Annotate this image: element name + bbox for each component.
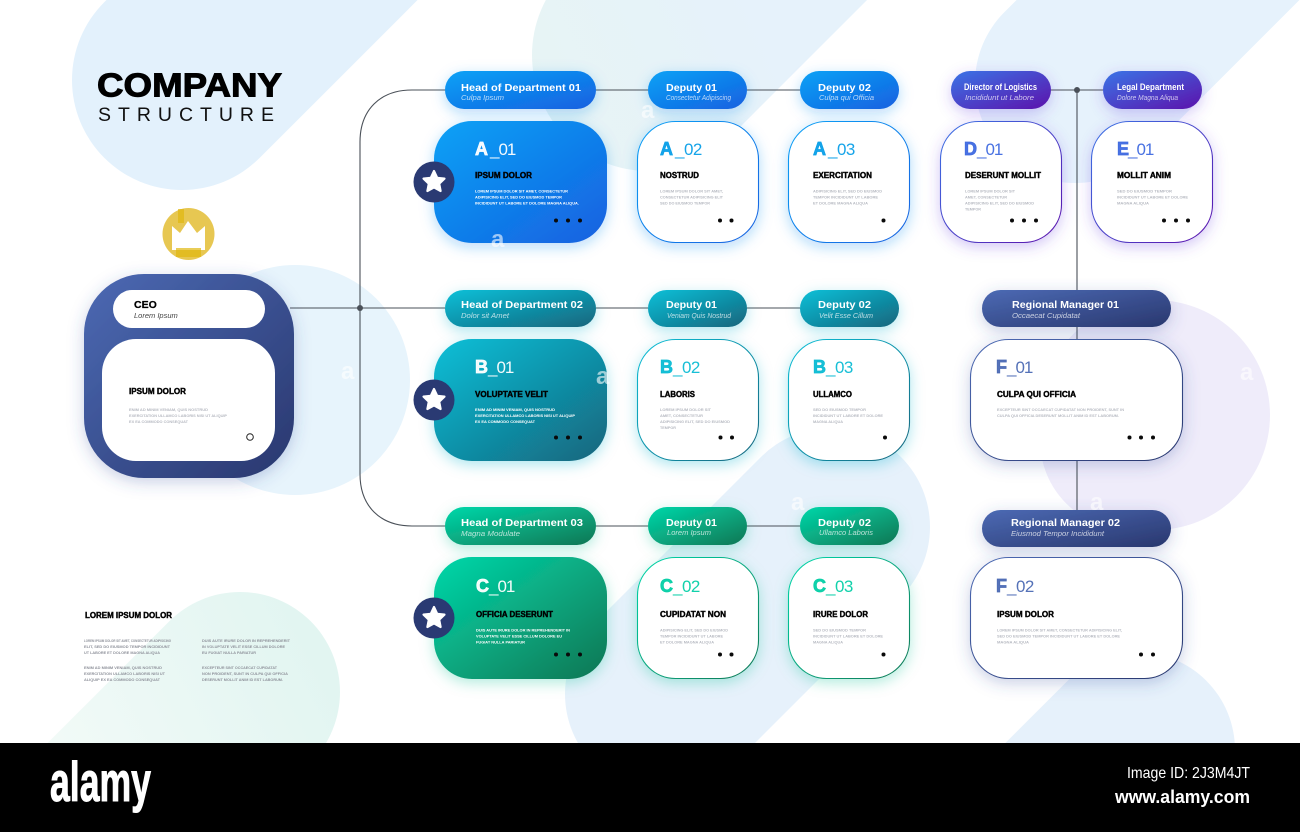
- icon: crown: [162, 208, 214, 260]
- footer bar: [0, 743, 1300, 832]
- card: B_03: [788, 340, 910, 460]
- card: B_01: _01: [487, 358, 514, 377]
- card: D_01: ADIPISICING ELIT, SED DO EIUSMOD: [965, 200, 1034, 206]
- card: B_03: MAGNA ALIQUA: [813, 419, 843, 424]
- pill: Head of Department 01: Head of Department 01: [461, 82, 581, 94]
- card: C_01: OFFICIA DESERUNT: [476, 610, 553, 619]
- CEO description: ENIM AD MINIM VENIAM, QUIS NOSTRUD: [129, 407, 208, 412]
- text block: notes: LOREM IPSUM DOLOR: [85, 611, 172, 620]
- card: F_01: CULPA QUI OFFICIA DESERUNT MOLLIT ANIM ID EST LABORUM.: [997, 413, 1119, 418]
- pill: Deputy 02 row A: [800, 71, 899, 109]
- card: B_02: TEMPOR: [660, 425, 676, 430]
- pill: Deputy 02 row A: Deputy 02: [818, 82, 871, 94]
- card: B_02: _02: [672, 358, 700, 377]
- card: C_03: MAGNA ALIQUA: [813, 640, 843, 644]
- watermark marks: a: [791, 489, 805, 516]
- card: A_02: SED DO EIUSMOD TEMPOR: [660, 200, 710, 206]
- card: F_01: [970, 340, 1182, 460]
- pill: Head of Department 03: Magna Modulate: [461, 529, 520, 538]
- card: C_03: INCIDIDUNT UT LABORE ET DOLORE: [813, 634, 883, 638]
- pill: Head of Department 02: [445, 290, 596, 327]
- card: A_02: _02: [674, 140, 702, 159]
- card: D_01: [940, 122, 1062, 242]
- card: A_03: _03: [827, 140, 855, 159]
- CEO description: EX EA COMMODO CONSEQUAT: [129, 419, 189, 424]
- watermark marks: a: [1240, 359, 1254, 386]
- card: B_03: INCIDIDUNT UT LABORE ET DOLORE: [813, 413, 883, 418]
- text block: notes: DESERUNT MOLLIT ANIM ID EST LABORUM.: [202, 677, 283, 682]
- pill: Head of Department 03: Head of Department 03: [461, 517, 583, 529]
- pill: Deputy 01 row C: Lorem Ipsum: [667, 528, 711, 537]
- text block: notes: DUIS AUTE IRURE DOLOR IN REPREHENDERIT: [202, 638, 291, 643]
- card: A_02: CONSECTETUR ADIPISICING ELIT: [660, 194, 724, 200]
- CEO description: EXERCITATION ULLAMCO LABORIS NISI UT ALIQUIP: [129, 413, 227, 418]
- card: E_01: MAGNA ALIQUA: [1117, 200, 1149, 206]
- card: C_01: _01: [488, 577, 515, 596]
- pill: Deputy 02 row A: Culpa qui Officia: [819, 93, 874, 102]
- card: C_02: _02: [672, 577, 700, 596]
- pill: Director of Logistics: Incididunt ut Labore: [965, 93, 1034, 102]
- CEO name pill: CEO: [134, 299, 157, 311]
- panel: CEO: [84, 274, 294, 478]
- text block: notes: ALIQUIP EX EA COMMODO CONSEQUAT: [84, 677, 161, 682]
- card: D_01: TEMPOR: [965, 206, 981, 212]
- watermark marks: a: [596, 363, 610, 390]
- card: B_01: VOLUPTATE VELIT: [475, 390, 548, 399]
- watermark marks: a: [1090, 489, 1104, 516]
- card: C_03: IRURE DOLOR: [813, 610, 868, 619]
- card: C_02: ADIPISICING ELIT, SED DO EIUSMOD: [660, 628, 728, 632]
- pill: Deputy 01 row C: [648, 507, 747, 545]
- card: B_01: B: [475, 357, 488, 377]
- card: D_01: D: [964, 139, 977, 159]
- footer bar: www.alamy.com: [1114, 787, 1250, 807]
- watermark marks: a: [641, 97, 655, 124]
- card: A_03: ADIPISICING ELIT, SED DO EIUSMOD: [813, 188, 882, 194]
- card: C_02: [638, 558, 758, 678]
- text block: notes: [84, 611, 291, 682]
- pill: Legal Department: Dolore Magna Aliqua: [1117, 93, 1178, 102]
- text block: notes: ELIT, SED DO EIUSMOD TEMPOR INCIDIDUNT: [84, 644, 171, 649]
- card: F_01: CULPA QUI OFFICIA: [997, 390, 1076, 399]
- card: C_01: [434, 557, 607, 679]
- watermark marks: a: [341, 358, 355, 385]
- card: D_01: LOREM IPSUM DOLOR SIT: [965, 188, 1016, 194]
- card: E_01: E: [1117, 139, 1129, 159]
- icon: star A: [414, 162, 454, 202]
- pill: Deputy 01 row B: [648, 290, 747, 327]
- card: B_01: EX EA COMMODO CONSEQUAT: [475, 419, 536, 424]
- card: E_01: INCIDIDUNT UT LABORE ET DOLORE: [1117, 194, 1188, 200]
- watermark marks: [341, 97, 1254, 516]
- pill: Legal Department: [1103, 71, 1202, 109]
- pill: Deputy 01 row B: Veniam Quis Nostrud: [667, 311, 732, 320]
- card: D_01: DESERUNT MOLLIT: [965, 171, 1041, 180]
- card: A_03: EXERCITATION: [813, 171, 872, 180]
- pill: Regional Manager 01: Occaecat Cupidatat: [1012, 311, 1081, 320]
- card: A_01: IPSUM DOLOR: [475, 171, 532, 180]
- card: B_02: LOREM IPSUM DOLOR SIT: [660, 407, 712, 412]
- card: C_03: C: [813, 576, 826, 596]
- pill: Head of Department 01: [445, 71, 596, 109]
- card: D_01: _01: [976, 140, 1003, 159]
- card: D_01: AMET, CONSECTETUR: [965, 194, 1007, 200]
- card: F_02: IPSUM DOLOR: [997, 610, 1054, 619]
- pill: Deputy 02 row C: Ullamco Laboris: [819, 528, 873, 537]
- CEO name pill: [113, 290, 265, 328]
- card: A_01: LOREM IPSUM DOLOR SIT AMET, CONSECTETUR: [475, 188, 568, 194]
- pill: Deputy 01 row B: Deputy 01: [666, 299, 717, 311]
- pill: Director of Logistics: Director of Logistics: [964, 82, 1037, 92]
- card: C_02: C: [660, 576, 673, 596]
- card: F_01: EXCEPTEUR SINT OCCAECAT CUPIDATAT NON PROIDENT, SUNT IN: [997, 407, 1124, 412]
- text block: notes: ENIM AD MINIM VENIAM, QUIS NOSTRUD: [84, 665, 162, 670]
- CEO name pill: Lorem Ipsum: [134, 311, 178, 320]
- pill: Deputy 01 row A: Consectetur Adipiscing: [666, 93, 732, 102]
- card: B_03: _03: [825, 358, 853, 377]
- card: A_02: LOREM IPSUM DOLOR SIT AMET,: [660, 188, 723, 194]
- card: C_02: ET DOLORE MAGNA ALIQUA: [660, 640, 714, 644]
- text block: notes: NON PROIDENT, SUNT IN CULPA QUI OFFICIA: [202, 671, 288, 676]
- title: STRUCTURE: [98, 104, 274, 126]
- pill: Deputy 02 row C: [800, 507, 899, 545]
- text block: notes: UT LABORE ET DOLORE MAGNA ALIQUA: [84, 650, 160, 655]
- card: F_01: F: [996, 357, 1007, 377]
- card: F_02: SED DO EIUSMOD TEMPOR INCIDIDUNT UT LABORE ET DOLORE: [997, 634, 1120, 638]
- pill: Deputy 02 row B: [800, 290, 899, 327]
- text block: notes: LOREM IPSUM DOLOR SIT AMET, CONSECTETUR ADIPISICING: [84, 638, 171, 643]
- card: A_02: A: [660, 139, 673, 159]
- pill: Deputy 01 row C: Deputy 01: [666, 517, 717, 529]
- card: A_03: A: [813, 139, 826, 159]
- card: A_03: TEMPOR INCIDIDUNT UT LABORE: [813, 194, 878, 200]
- pill: Regional Manager 01: [982, 290, 1171, 327]
- card: B_01: ENIM AD MINIM VENIAM, QUIS NOSTRUD: [475, 407, 555, 412]
- pill: Head of Department 02: Head of Department 02: [461, 299, 583, 311]
- pill: Head of Department 01: Culpa Ipsum: [461, 93, 504, 102]
- pill: Deputy 01 row A: [648, 71, 747, 109]
- card: B_01: EXERCITATION ULLAMCO LABORIS NISI UT ALIQUIP: [475, 413, 575, 418]
- pill: Deputy 02 row B: Deputy 02: [818, 299, 871, 311]
- card: F_02: _02: [1006, 577, 1034, 596]
- card: C_02: CUPIDATAT NON: [660, 610, 726, 619]
- pill: Deputy 02 row B: Velit Esse Cillum: [819, 311, 873, 320]
- card: A_01: ADIPISICING ELIT, SED DO EIUSMOD TEMPOR: [475, 194, 562, 200]
- card: F_02: [970, 558, 1182, 678]
- card: F_02: MAGNA ALIQUA: [997, 640, 1029, 644]
- card: F_02: LOREM IPSUM DOLOR SIT AMET, CONSECTETUR ADIPISICING ELIT,: [997, 628, 1122, 632]
- card: E_01: _01: [1127, 140, 1154, 159]
- card: E_01: SED DO EIUSMOD TEMPOR: [1117, 188, 1172, 194]
- text block: notes: EXERCITATION ULLAMCO LABORIS NISI UT: [84, 671, 166, 676]
- card: B_01: [434, 339, 607, 461]
- card: F_02: F: [996, 576, 1007, 596]
- footer bar: alamy: [50, 750, 151, 813]
- pill: Head of Department 02: Dolor sit Amet: [461, 311, 510, 320]
- watermark marks: a: [491, 226, 505, 253]
- pill: Deputy 01 row A: Deputy 01: [666, 82, 717, 94]
- pill: Regional Manager 02: [982, 510, 1171, 547]
- title: [97, 68, 282, 126]
- card: A_01: [434, 121, 607, 243]
- card: B_03: ULLAMCO: [813, 390, 852, 399]
- footer bar: Image ID: 2J3M4JT: [1127, 765, 1250, 782]
- card: B_02: [638, 340, 758, 460]
- text block: notes: EXCEPTEUR SINT OCCAECAT CUPIDATAT: [202, 665, 278, 670]
- pill: Regional Manager 01: Regional Manager 01: [1012, 299, 1119, 311]
- card: F_01: _01: [1006, 358, 1033, 377]
- card: E_01: [1092, 122, 1212, 242]
- card: B_03: B: [813, 357, 826, 377]
- card: C_03: [788, 558, 910, 678]
- card: C_01: VOLUPTATE VELIT ESSE CILLUM DOLORE EU: [476, 634, 562, 638]
- card: A_02: [638, 122, 758, 242]
- card: A_01: _01: [489, 140, 516, 159]
- card: C_01: FUGIAT NULLA PARIATUR: [476, 640, 525, 644]
- card: B_02: ADIPISICING ELIT, SED DO EIUSMOD: [660, 419, 730, 424]
- card: C_02: TEMPOR INCIDIDUNT UT LABORE: [660, 634, 723, 638]
- pill: Head of Department 03: [445, 507, 596, 545]
- pill: Regional Manager 02: Eiusmod Tempor Incididunt: [1011, 529, 1105, 538]
- card: A_03: ET DOLORE MAGNA ALIQUA: [813, 200, 868, 206]
- card: C_03: SED DO EIUSMOD TEMPOR: [813, 628, 866, 632]
- pill: Legal Department: Legal Department: [1117, 82, 1184, 92]
- card: C_03: _03: [825, 577, 853, 596]
- card: A_01: A: [475, 139, 488, 159]
- card: C_01: DUIS AUTE IRURE DOLOR IN REPREHENDERIT IN: [476, 628, 570, 632]
- icon: star C: [414, 598, 454, 638]
- card: B_03: SED DO EIUSMOD TEMPOR: [813, 407, 866, 412]
- card: B_02: B: [660, 357, 673, 377]
- pill: Director of Logistics: [951, 71, 1051, 109]
- card: E_01: MOLLIT ANIM: [1117, 171, 1171, 180]
- card: C_01: C: [476, 576, 489, 596]
- CEO description: [102, 339, 275, 461]
- pill: Deputy 02 row C: Deputy 02: [818, 517, 871, 529]
- text block: notes: IN VOLUPTATE VELIT ESSE CILLUM DOLORE: [202, 644, 285, 649]
- card: B_02: LABORIS: [660, 390, 696, 399]
- card: B_02: AMET, CONSECTETUR: [660, 413, 703, 418]
- card: A_01: INCIDIDUNT UT LABORE ET DOLORE MAGNA ALIQUA.: [475, 200, 579, 206]
- pill: Regional Manager 02: Regional Manager 02: [1011, 517, 1120, 529]
- CEO description: IPSUM DOLOR: [129, 387, 186, 396]
- text block: notes: EU FUGIAT NULLA PARIATUR: [202, 650, 256, 655]
- card: A_03: [788, 122, 910, 242]
- card: A_02: NOSTRUD: [660, 171, 699, 180]
- icon: star B: [414, 380, 454, 420]
- title: COMPANY: [97, 68, 282, 104]
- connector lines: [290, 87, 1103, 526]
